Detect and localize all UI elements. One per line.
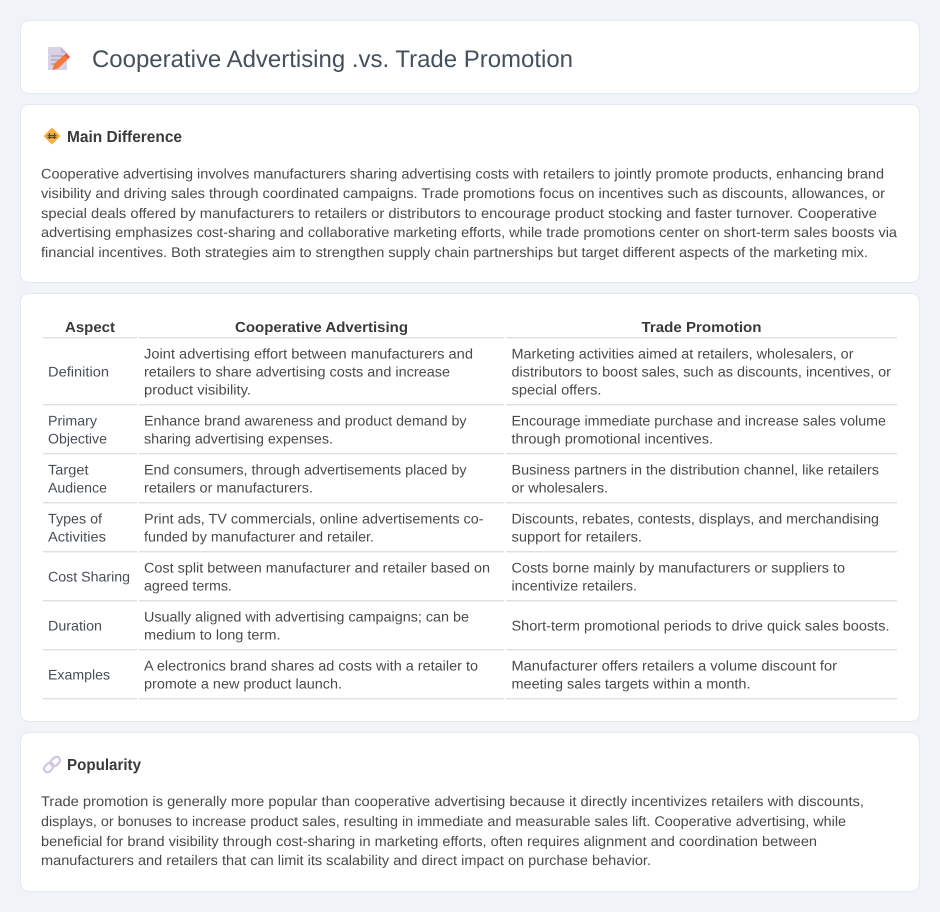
row: types of activities: Types of	[48, 510, 102, 526]
text block: popularity	[41, 793, 864, 868]
row: examples: Examples	[48, 666, 110, 682]
row: duration: medium to long term.	[144, 626, 280, 642]
row: types of activities: Discounts, rebates, contests, displays, and merchandising	[512, 510, 879, 526]
row: examples	[43, 658, 897, 699]
row: primary objective: Enhance brand awareness and product demand by	[144, 412, 466, 428]
row: examples: Manufacturer offers retailers a volume discount for	[512, 658, 837, 674]
row: types of activities	[43, 510, 897, 552]
row: examples: promote a new product launch.	[144, 676, 342, 692]
row: duration	[43, 608, 897, 650]
text block: popularity: beneficial for brand visibility through cost-sharing in marketing efforts, often requires alignment and coordination between	[41, 833, 817, 849]
row: cost sharing	[43, 560, 897, 601]
row: primary objective: Encourage immediate purchase and increase sales volume	[512, 412, 886, 428]
row: definition: Joint advertising effort between manufacturers and	[144, 346, 473, 362]
row: definition: special offers.	[512, 382, 602, 398]
table header: Aspect	[65, 320, 115, 336]
row: primary objective: Primary	[48, 412, 97, 428]
row: duration: Duration	[48, 618, 102, 634]
table header: Cooperative Advertising	[235, 320, 408, 336]
row: target audience	[43, 462, 897, 503]
row: cost sharing: agreed terms.	[144, 578, 232, 594]
row: cost sharing: Cost split between manufacturer and retailer based on	[144, 560, 490, 576]
row: target audience: End consumers, through advertisements placed by	[144, 462, 466, 478]
row: target audience: retailers or manufacturers.	[144, 480, 313, 496]
row: target audience: or wholesalers.	[512, 480, 608, 496]
text block: main difference	[41, 166, 897, 260]
row: definition: Marketing activities aimed at retailers, wholesalers, or	[512, 346, 854, 362]
row: primary objective: sharing advertising expenses.	[144, 430, 333, 446]
row: types of activities: funded by manufacturer and retailer.	[144, 528, 374, 544]
row: primary objective: Objective	[48, 430, 107, 446]
text block: popularity: manufacturers and retailers that can limit its scalability and direct impact on purchase behavior.	[41, 852, 651, 868]
text block: main difference: visibility and driving sales through coordinated campaigns. Trade promotions focus on incentives such as discounts, allowances, or	[41, 185, 885, 201]
table header	[43, 320, 897, 338]
text block: main difference: advertising emphasizes cost-sharing and collaborative marketing efforts, while trade promotions center on short-term sales boosts via	[41, 224, 897, 240]
row: types of activities: Activities	[48, 528, 106, 544]
text block: popularity: Trade promotion is generally more popular than cooperative advertising because it directly incentivizes retailers with discounts,	[41, 793, 864, 809]
text block: main difference: Cooperative advertising involves manufacturers sharing advertising costs with retailers to jointly promote products, enhancing brand	[41, 166, 884, 182]
row: definition: distributors to boost sales, such as discounts, incentives, or	[512, 364, 891, 380]
panel: popularity	[20, 732, 920, 892]
row: definition	[43, 346, 897, 405]
heading: popularity: Popularity	[67, 757, 141, 774]
row: target audience: Business partners in the distribution channel, like retailers	[512, 462, 879, 478]
panel: main difference	[20, 104, 920, 282]
row: target audience: Target	[48, 462, 89, 478]
text block: popularity: displays, or bonuses to increase product sales, resulting in immediate and measurable sales lift. Cooperative advertising, while	[41, 813, 846, 829]
row: duration: Usually aligned with advertising campaigns; can be	[144, 608, 469, 624]
row: examples: A electronics brand shares ad costs with a retailer to	[144, 658, 478, 674]
row: examples: meeting sales targets within a month.	[512, 676, 750, 692]
row: cost sharing: incentivize retailers.	[512, 578, 637, 594]
row: cost sharing: Cost Sharing	[48, 568, 130, 584]
row: primary objective: through promotional incentives.	[512, 430, 713, 446]
heading: main difference: Main Difference	[67, 129, 182, 146]
row: cost sharing: Costs borne mainly by manufacturers or suppliers to	[512, 560, 845, 576]
table header: Trade Promotion	[642, 320, 762, 336]
panel: title	[20, 20, 920, 94]
icon: memo with pencil	[48, 47, 70, 70]
title text: Cooperative Advertising .vs. Trade Promotion	[92, 46, 573, 73]
row: types of activities: support for retailers.	[512, 528, 642, 544]
row: definition: Definition	[48, 364, 109, 380]
text block: main difference: special deals offered by manufacturers to retailers or distributors to encourage product stocking and faster turnover. Cooperative	[41, 205, 877, 221]
row: duration: Short-term promotional periods to drive quick sales boosts.	[512, 618, 890, 634]
row: types of activities: Print ads, TV commercials, online advertisements co-	[144, 510, 484, 526]
row: primary objective	[43, 412, 897, 454]
row: definition: retailers to share advertising costs and increase	[144, 364, 450, 380]
row: target audience: Audience	[48, 480, 107, 496]
text block: main difference: financial incentives. Both strategies aim to strengthen supply chain partnerships but target different aspects of the marketing mix.	[41, 244, 868, 260]
icon: link	[43, 755, 61, 774]
icon: warning diamond	[44, 128, 60, 144]
panel: comparison table	[20, 294, 920, 722]
row: definition: product visibility.	[144, 382, 251, 398]
